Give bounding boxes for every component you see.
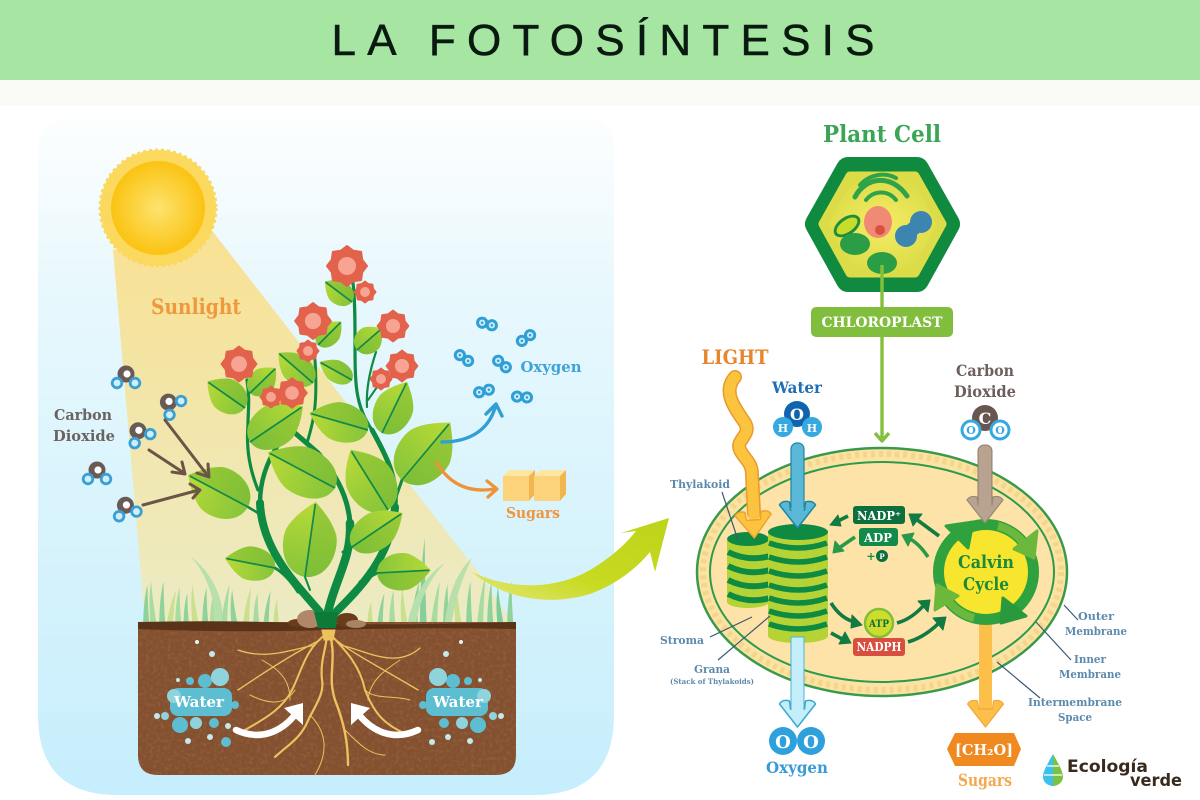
label: ATP (865, 609, 893, 637)
water molecule: H (807, 422, 817, 435)
thylakoid stack: large (768, 524, 828, 643)
label: ATP: ATP (868, 619, 889, 630)
logo: ecología verde (1043, 754, 1182, 791)
carbon dioxide molecule: Dioxide (954, 382, 1016, 401)
label: intermembrane space: Intermembrane (1028, 695, 1122, 709)
golgi (855, 175, 907, 200)
label: carbon dioxide: Carbon (54, 406, 112, 424)
label: grana (670, 616, 770, 686)
flowers (221, 246, 418, 408)
calvin cycle (935, 522, 1037, 623)
water molecule (771, 378, 823, 437)
label: phosphate: + (866, 550, 876, 563)
connector line (880, 265, 884, 438)
carbon dioxide molecule: C (979, 409, 991, 428)
arrow: sugars out (968, 620, 1004, 727)
stem base (314, 612, 338, 628)
label: grana: (Stack of Thylakoids) (670, 677, 754, 686)
arrows: carbon dioxide into leaf (143, 420, 209, 505)
carbon dioxide molecule (954, 361, 1016, 439)
title banner: LA FOTOSÍNTESIS (332, 16, 874, 65)
panel: chloroplast (660, 345, 1127, 790)
heading: plant cell: Plant Cell (823, 121, 941, 148)
nucleus (864, 206, 892, 238)
panel: plant cell (811, 121, 953, 441)
label: stroma (660, 617, 752, 647)
water molecule: O (790, 405, 804, 424)
carbon dioxide molecule: O (966, 424, 976, 437)
label: carbon dioxide: Dioxide (53, 427, 115, 445)
label: phosphate (866, 550, 888, 563)
organelle (840, 233, 870, 255)
sky background (38, 118, 614, 795)
calvin cycle: Cycle (963, 574, 1009, 595)
outer membrane (697, 448, 1067, 696)
label: stroma: Stroma (660, 633, 705, 647)
panel: plant scene (38, 118, 614, 795)
label: NADPH (853, 638, 905, 656)
arrow: plant to chloroplast (472, 518, 669, 600)
label: sunlight: Sunlight (151, 294, 241, 319)
label: oxygen molecule: O (775, 732, 791, 753)
water molecule: H (778, 422, 788, 435)
label: oxygen molecule: Oxygen (766, 758, 828, 777)
label: NADP+: NADP⁺ (857, 509, 901, 523)
label: thylakoid (670, 477, 738, 540)
label: outer membrane (1064, 605, 1127, 638)
label: inner membrane (1036, 622, 1121, 681)
oxygen molecules (453, 317, 537, 402)
title banner (0, 0, 1200, 106)
label: water: Water (432, 693, 484, 711)
arrow: carbon dioxide (967, 445, 1003, 523)
cycle arrows (830, 514, 946, 644)
label: carbon dioxide (53, 406, 115, 445)
water: right (419, 640, 504, 745)
plant (176, 246, 471, 628)
arrow: water to roots, left (236, 703, 303, 735)
label: outer membrane: Membrane (1065, 624, 1127, 638)
label: inner membrane: Inner (1074, 652, 1107, 666)
arrow: sugars out of leaf (437, 463, 497, 497)
arrow: oxygen out of leaf (442, 404, 502, 442)
label: grana: Grana (694, 662, 730, 676)
label: oxygen molecule: O (803, 732, 819, 753)
label: thylakoid: Thylakoid (670, 477, 730, 491)
grass (143, 538, 513, 622)
label: chloroplast (811, 307, 953, 337)
mitochondrion (830, 210, 864, 242)
carbon dioxide molecule: O (995, 424, 1005, 437)
stems (247, 283, 402, 613)
thylakoid stack: small (727, 532, 770, 608)
label: sugars formula (947, 733, 1021, 790)
arrowhead (875, 433, 889, 441)
label: ADP (859, 528, 898, 546)
logo: ecología verde: Ecología (1067, 757, 1148, 777)
label: calvin cycle: Calvin (958, 552, 1014, 573)
sunlight beam (113, 228, 512, 622)
intermembrane pattern (703, 454, 1061, 690)
arrow: light (730, 377, 772, 539)
carbon dioxide molecules (83, 366, 188, 522)
label: water: Water (173, 693, 225, 711)
icon: sun (100, 150, 216, 266)
water: left (154, 640, 239, 747)
icon: sugar cubes (503, 470, 566, 501)
label: sugars formula: [CH₂O] (955, 741, 1013, 759)
label: sugars formula: Sugars (958, 771, 1012, 790)
label: light: LIGHT (702, 345, 769, 369)
label: intermembrane space: Space (1058, 710, 1092, 724)
hexagonal cell (817, 169, 948, 280)
label: NADPH: NADPH (856, 640, 902, 654)
leaves (176, 272, 471, 592)
arrow: oxygen out (780, 637, 816, 727)
label: carbon dioxide: Carbon (956, 361, 1014, 380)
soil (138, 610, 516, 775)
label: intermembrane space (997, 662, 1122, 724)
logo: ecología verde: verde (1130, 771, 1182, 791)
arrow: water (780, 443, 816, 528)
label: ADP: ADP (863, 531, 892, 545)
label: water: Water (771, 378, 823, 397)
label: oxygen molecule (766, 727, 828, 777)
label: inner membrane: Membrane (1059, 667, 1121, 681)
label: chloroplast: CHLOROPLAST (822, 315, 943, 331)
label: NADP+ (853, 506, 905, 524)
inner membrane (710, 462, 1054, 682)
arrow: water to roots, right (351, 703, 418, 735)
label: oxygen: Oxygen (520, 358, 582, 376)
label: phosphate: P (879, 552, 885, 561)
icon: leaf drop (1043, 754, 1063, 786)
label: outer membrane: Outer (1078, 609, 1115, 623)
roots (238, 630, 420, 775)
vacuole (895, 211, 932, 247)
label: sugars: Sugars (506, 504, 560, 522)
